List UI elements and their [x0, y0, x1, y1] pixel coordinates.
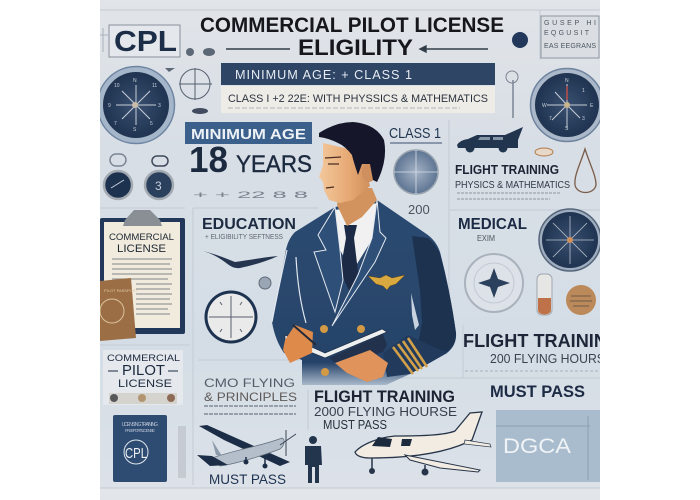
banner: minimum age and class: [221, 63, 495, 113]
left hand: [283, 325, 313, 363]
top-right data box: EAS EEGRANS: [544, 43, 596, 50]
buttons: [320, 325, 365, 376]
lapel left: [314, 207, 343, 312]
pilot figure: [272, 122, 456, 385]
icon: pendant gauge: [506, 71, 518, 118]
eye and brow: [325, 157, 341, 188]
pattern strip: [178, 426, 186, 478]
icon: small plane: [197, 425, 296, 468]
heading: flight training 200 hours: FLIGHT TRAINING: [463, 331, 621, 351]
compass: top right: 7: [549, 116, 552, 122]
passport: CPL: PASSPORT LICENSE: [125, 428, 155, 433]
text block: flying: & PRINCIPLES: [204, 392, 297, 404]
heading: flight training, physics and mathematics: FLIGHT TRAINING: [455, 162, 559, 177]
icon: vial: [537, 274, 552, 315]
compass: top left: S: [133, 127, 137, 133]
compass: top left: 9: [108, 103, 111, 109]
stopwatches: [104, 154, 173, 199]
book: [285, 329, 387, 358]
heading: lower flight training: 2000 FLYING HOURSE: [314, 404, 457, 419]
passport: CPL: CPL: [125, 445, 147, 462]
heading: flight training, physics and mathematics: [455, 162, 570, 199]
heading: lower flight training: MUST PASS: [323, 418, 387, 432]
passport: CPL: LICENSING TRAINING: [122, 422, 158, 428]
heading: flight training, physics and mathematics: PHYSICS & MATHEMATICS: [455, 180, 570, 191]
compass: top right: 1: [582, 88, 585, 94]
stopwatches: 3: [155, 179, 162, 193]
icon: car-like plane: [457, 127, 523, 152]
wings badge: [368, 275, 405, 290]
stat: 200: 200: [408, 202, 430, 217]
label: must pass (left): MUST PASS: [209, 471, 286, 487]
icon: gauge: [394, 150, 438, 194]
sleeve piping: [272, 250, 306, 323]
compass: top right: S: [565, 126, 569, 132]
background panel: [100, 0, 600, 500]
panel: DGCA: DGCA: [503, 435, 571, 458]
pen: [293, 325, 316, 345]
title: ELIGILITY: [298, 35, 413, 60]
icon: teardrop loop: [575, 149, 596, 192]
compass: top right: [530, 68, 604, 142]
shirt: [335, 203, 378, 272]
icon: brown seal: [566, 285, 596, 315]
icon: person: [305, 436, 322, 483]
title rules: [226, 46, 488, 52]
heading: education: + ELIGIBILITY SEFTNESS: [205, 234, 283, 241]
compass: top right: W: [542, 103, 547, 109]
compass: top left: 5: [150, 121, 153, 127]
banner: minimum age and class: CLASS I +2 22E: WITH PHYSSICS & MATHEMATICS: [228, 93, 488, 105]
passport: brown: [100, 278, 139, 341]
cuff: [383, 335, 447, 377]
icon: large plane: [355, 412, 491, 476]
compass: top left: 7: [114, 121, 117, 127]
compass: top right: 3: [582, 116, 585, 122]
banner: minimum age and class: MINIMUM AGE: + CLASS 1: [235, 67, 413, 82]
card: commercial pilot license: COMMERCIAL: [107, 353, 180, 364]
icon: navigation dial: [465, 254, 523, 312]
heading: flight training 200 hours: 200 FLYING HOURS: [490, 352, 605, 366]
compass: top left: [98, 66, 174, 144]
neck: [337, 188, 377, 226]
stat: 18 years: + + 22 8 8: [193, 190, 308, 200]
compass: top right: E: [590, 103, 594, 109]
lapel right: [332, 200, 386, 326]
icon: clock: [204, 290, 258, 344]
card: commercial pilot license: PILOT: [122, 362, 165, 379]
stat: 18 years: YEARS: [236, 151, 312, 178]
clipboard: commercial license: COMMERCIAL: [109, 232, 174, 243]
small seal: [259, 277, 271, 289]
icon: aircraft silhouette: [203, 251, 278, 268]
panel: DGCA: [496, 410, 600, 482]
small instrument icons top: [165, 48, 215, 114]
compass: top left: 10: [114, 83, 120, 89]
heading: class 1: CLASS 1: [389, 125, 441, 142]
badge: minimum age: [185, 122, 312, 144]
right hand: [335, 350, 388, 382]
heading: education: EDUCATION: [202, 216, 296, 233]
sleeve shadow: [412, 236, 456, 352]
pilot jacket: [272, 200, 456, 385]
top-right data box: EQGUSIT: [544, 30, 590, 37]
stat: 18 years: [189, 139, 312, 200]
top-right data box: GUSEP HI: [544, 20, 596, 27]
heading: lower flight training: FLIGHT TRAINING: [314, 388, 455, 406]
small charm: [535, 148, 553, 156]
card: commercial pilot license: [103, 350, 183, 405]
heading: must pass (right): MUST PASS: [490, 383, 585, 401]
stat: 18 years: 18: [189, 139, 228, 180]
compass: top left: N: [133, 78, 137, 84]
clipboard: commercial license: [100, 210, 185, 334]
heading: medical: EXIM: [477, 234, 495, 243]
sleeve stripes: [393, 338, 427, 374]
card: commercial pilot license: LICENSE: [118, 378, 172, 390]
compass: top left: 3: [158, 103, 161, 109]
top-right data box: [512, 16, 599, 58]
passport: brown: PILOT PASSPORT: [104, 288, 139, 293]
heading: flight training 200 hours: [463, 331, 621, 371]
text block: flying: [204, 378, 297, 414]
title: COMMERCIAL PILOT LICENSE: [200, 14, 504, 37]
text block: flying: CMO FLYING: [204, 378, 295, 390]
heading: education: [202, 216, 296, 241]
clipboard: commercial license: LICENSE: [117, 243, 166, 255]
compass: top left: 11: [152, 83, 157, 89]
underarm gap: [411, 293, 419, 330]
passport: CPL: [113, 415, 167, 482]
heading: lower flight training: [314, 388, 457, 432]
ear: [362, 162, 376, 182]
heading: medical: MEDICAL: [458, 216, 527, 233]
tie: [340, 225, 358, 292]
title: [200, 14, 504, 60]
compass: medical: [539, 209, 601, 271]
hair: [319, 122, 385, 182]
badge: minimum age: MINIMUM AGE: [191, 126, 306, 143]
compass: top right: N: [565, 78, 569, 84]
face: [319, 143, 370, 203]
CPL logo box: CPL: [114, 26, 177, 58]
heading: medical: [458, 216, 527, 243]
